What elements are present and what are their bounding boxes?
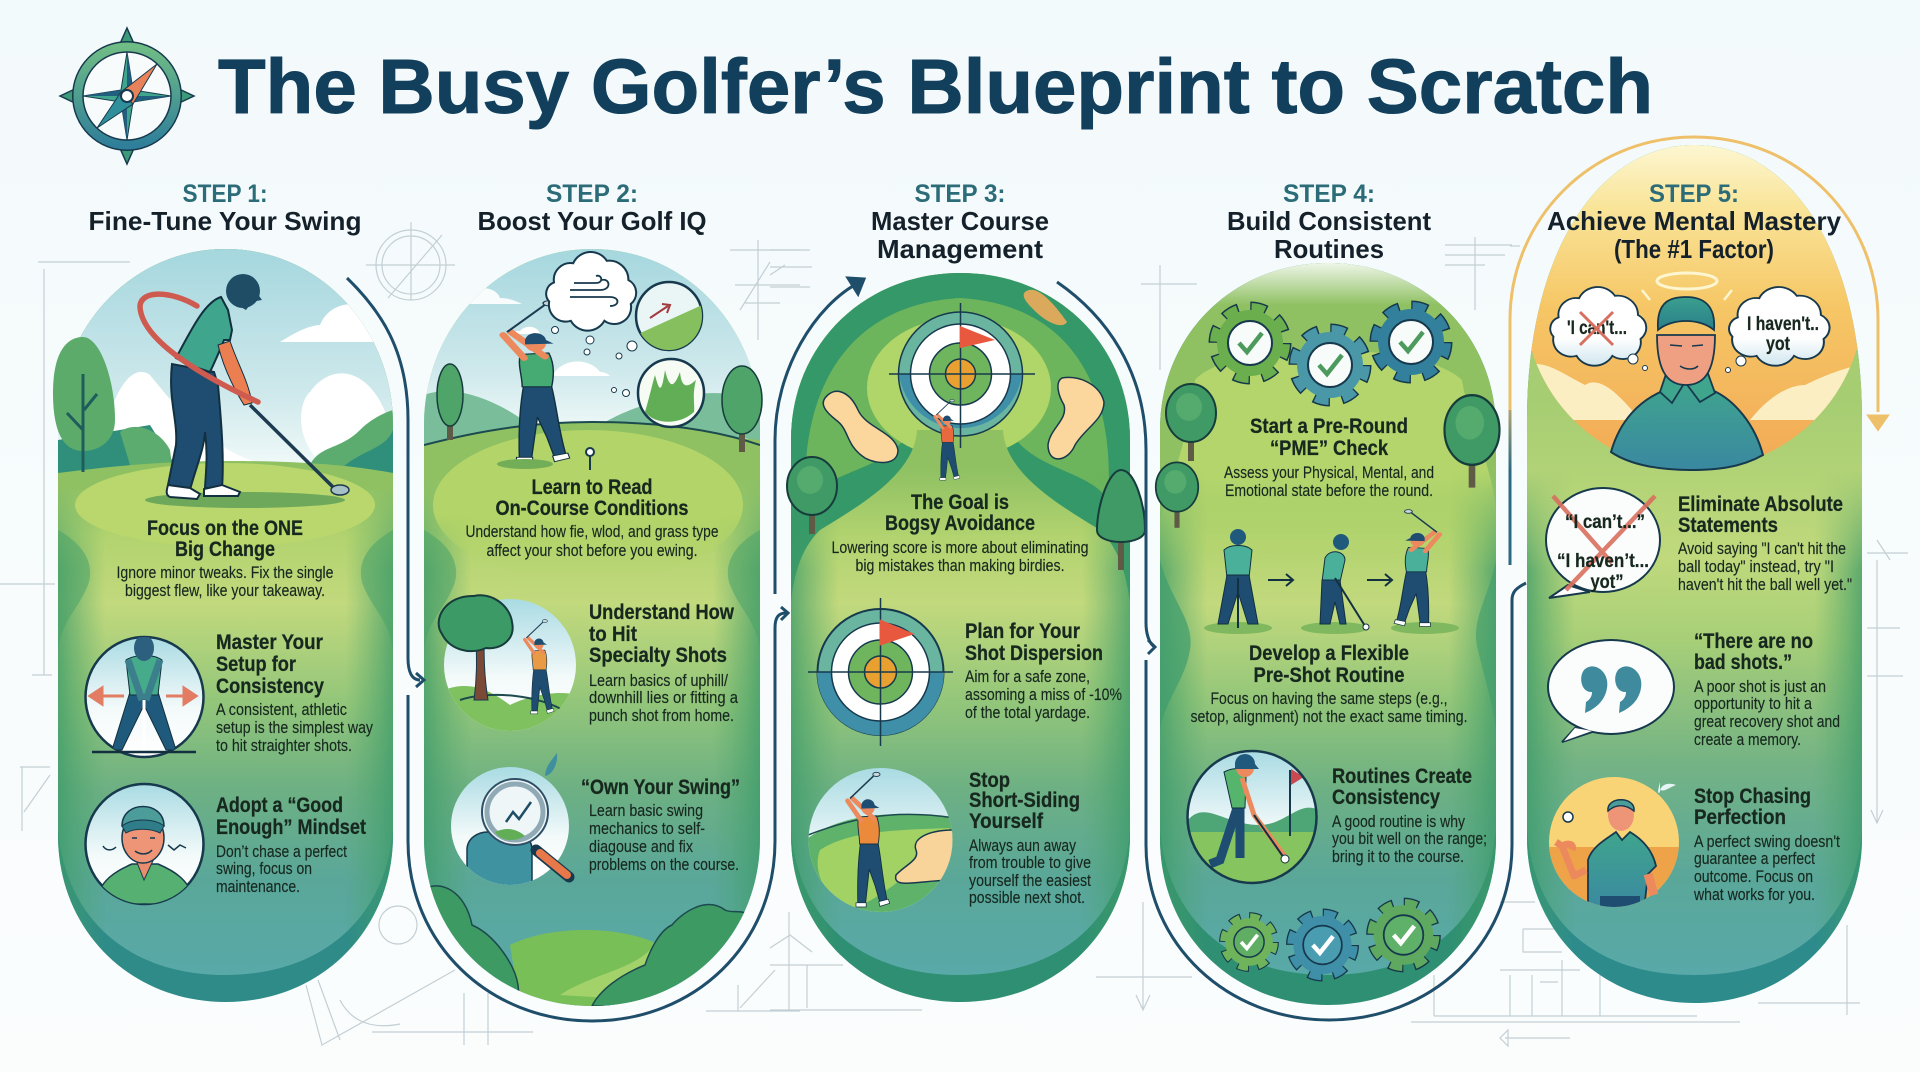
text: the goal is bogsy avoidance: big mistakes than making birdies.: [856, 557, 1064, 575]
icon: compass: [60, 28, 194, 164]
illustration: calm golfer with thought clouds: yot: [1766, 334, 1791, 355]
text: stop short-siding yourself: Yourself: [969, 810, 1044, 833]
text: own your swing: “Own Your Swing”: [581, 776, 740, 799]
text: focus on the one big change: Big Change: [175, 538, 275, 561]
icon: golfer beside bunker: [808, 768, 955, 915]
panel 3 background: [791, 200, 1130, 1002]
text: understand specialty shots: downhill lies or fitting a: [589, 689, 739, 707]
text: flexible pre-shot routine: Focus on having the same steps (e.g.,: [1210, 690, 1448, 708]
title: The Busy Golfer’s Blueprint to Scratch: [218, 44, 1653, 130]
text: eliminate absolute statements: [1678, 493, 1852, 594]
icon: golfer shrugging in sun circle: [1549, 777, 1679, 910]
text: understand specialty shots: punch shot from home.: [589, 707, 734, 725]
text: flexible pre-shot routine: Pre-Shot Routine: [1254, 664, 1404, 687]
text: adopt a good enough mindset: Adopt a “Good: [216, 794, 343, 817]
text: stop short-siding yourself: [969, 769, 1091, 907]
text: routines create consistency: you bit well on the range;: [1332, 830, 1487, 848]
text: there are no bad shots: opportunity to hit a: [1694, 695, 1813, 713]
illustration: calm golfer with thought clouds: 'I can't...: [1567, 318, 1627, 339]
text: there are no bad shots: create a memory.: [1694, 731, 1801, 749]
text: pre-round pme check: [1224, 415, 1434, 500]
icon: crossed out speech bubble: yot”: [1590, 572, 1624, 593]
text: understand specialty shots: Understand How: [589, 601, 735, 624]
heading: step 2: STEP 2:: [546, 180, 638, 208]
arrow: step 4 loop to step 5: [1146, 400, 1526, 1020]
text: the goal is bogsy avoidance: Bogsy Avoidance: [885, 512, 1035, 535]
text: learn to read on-course conditions: [466, 476, 718, 560]
text: focus on the one big change: Focus on the ONE: [147, 517, 303, 540]
text: there are no bad shots: bad shots.”: [1694, 651, 1792, 674]
text: stop short-siding yourself: Always aun away: [969, 837, 1077, 855]
text: master your setup: to hit straighter shots.: [216, 737, 352, 755]
text: there are no bad shots: “There are no: [1694, 630, 1813, 653]
text: master your setup: Consistency: [216, 675, 324, 698]
heading: step 5: Achieve Mental Mastery: [1547, 206, 1842, 236]
heading: step 4: Routines: [1274, 234, 1384, 264]
heading: step 3: Management: [877, 234, 1043, 264]
text: learn to read on-course conditions: Learn to Read: [532, 476, 652, 499]
text: stop chasing perfection: Stop Chasing: [1694, 785, 1811, 808]
arrow: step 2 loop to step 3: [408, 278, 864, 1021]
illustration: golfer reading conditions with thought bubbles: [437, 252, 762, 470]
text: focus on the one big change: [116, 517, 334, 600]
panel: step 3: [787, 200, 1145, 1002]
icon: tree and specialty shot golfer: [439, 595, 576, 735]
text: learn to read on-course conditions: On-Course Conditions: [496, 497, 688, 520]
text: own your swing: [581, 776, 740, 874]
text: stop short-siding yourself: possible next shot.: [969, 889, 1085, 907]
heading: step 3: [871, 180, 1049, 264]
text: adopt a good enough mindset: Don’t chase a perfect: [216, 843, 347, 861]
icon: target with flag: [808, 598, 953, 746]
text: master your setup: [216, 631, 374, 755]
heading: step 3: Master Course: [871, 206, 1049, 236]
text: plan for your shot dispersion: Plan for Your: [965, 620, 1080, 643]
text: pre-round pme check: Start a Pre-Round: [1250, 415, 1408, 438]
text: stop short-siding yourself: yourself the easiest: [969, 872, 1091, 890]
heading: step 5: [1547, 180, 1842, 264]
illustration: target with flag, bunkers and golfer: [787, 303, 1145, 570]
text: eliminate absolute statements: Eliminate Absolute: [1678, 493, 1843, 516]
icon: quote speech bubble: [1548, 640, 1674, 742]
text: plan for your shot dispersion: of the total yardage.: [965, 704, 1090, 722]
panel: step 4: [1156, 200, 1500, 1005]
text: routines create consistency: Consistency: [1332, 786, 1440, 809]
text: flexible pre-shot routine: setop, alignment) not the exact same timing.: [1190, 708, 1468, 726]
text: own your swing: Learn basic swing: [589, 802, 703, 820]
illustration: golfer at address with red swing path: [53, 274, 349, 508]
arrow: step 1 to step 2: [347, 278, 424, 687]
text: flexible pre-shot routine: [1190, 642, 1468, 726]
text: pre-round pme check: Emotional state before the round.: [1225, 482, 1433, 500]
heading: step 1: STEP 1:: [182, 180, 268, 208]
text: focus on the one big change: Ignore minor tweaks. Fix the single: [116, 564, 334, 582]
text: pre-round pme check: “PME” Check: [1270, 437, 1388, 460]
heading: step 3: STEP 3:: [914, 180, 1006, 208]
heading: step 4: [1227, 180, 1431, 264]
text: plan for your shot dispersion: [965, 620, 1122, 722]
text: master your setup: setup is the simplest way: [216, 719, 374, 737]
arrow: step 3 to step 4: [1057, 282, 1155, 654]
icon: three checked gears: [1217, 309, 1444, 398]
text: eliminate absolute statements: Statements: [1678, 514, 1778, 537]
text: master your setup: Setup for: [216, 653, 296, 676]
icon: golfer on the range: [1188, 751, 1318, 885]
text: there are no bad shots: [1694, 630, 1840, 749]
text: plan for your shot dispersion: assoming a miss of -10%: [965, 686, 1122, 704]
icon: crossed out speech bubble: “I haven’t...: [1557, 551, 1649, 572]
text: understand specialty shots: Specialty Shots: [589, 644, 727, 667]
text: flexible pre-shot routine: Develop a Flexible: [1249, 642, 1409, 665]
panel 1 background: [58, 200, 395, 1002]
text: adopt a good enough mindset: swing, focus on: [216, 860, 312, 878]
text: stop short-siding yourself: Short-Siding: [969, 789, 1080, 812]
panel: step 2: [420, 249, 762, 1006]
text: stop chasing perfection: A perfect swing doesn't: [1694, 833, 1840, 851]
icon: bottom gears with check marks: [1225, 905, 1433, 974]
panel 5 background: [1524, 100, 1864, 1003]
text: master your setup: A consistent, athletic: [216, 701, 347, 719]
panel 2 background: [420, 249, 760, 1006]
text: stop chasing perfection: [1693, 785, 1840, 904]
text: stop chasing perfection: guarantee a perfect: [1694, 850, 1815, 868]
text: routines create consistency: Routines Create: [1332, 765, 1472, 788]
text: learn to read on-course conditions: affect your shot before you ewing.: [486, 542, 698, 560]
text: adopt a good enough mindset: Enough” Mindset: [216, 816, 366, 839]
icon: crossed out speech bubble: [1546, 488, 1660, 598]
text: understand specialty shots: Learn basics of uphill/: [589, 672, 728, 690]
text: stop chasing perfection: outcome. Focus on: [1694, 868, 1813, 886]
text: plan for your shot dispersion: Aim for a safe zone,: [965, 668, 1090, 686]
heading: step 5: STEP 5:: [1649, 180, 1739, 208]
text: stop short-siding yourself: from trouble to give: [969, 854, 1091, 872]
text: adopt a good enough mindset: maintenance.: [216, 878, 300, 896]
text: plan for your shot dispersion: Shot Dispersion: [965, 642, 1103, 665]
text: eliminate absolute statements: haven't hit the ball well yet.": [1678, 576, 1852, 594]
heading: step 1: [88, 180, 362, 236]
text: eliminate absolute statements: Avoid saying "I can't hit the: [1678, 540, 1846, 558]
text: understand specialty shots: [589, 601, 739, 725]
text: the goal is bogsy avoidance: Lowering score is more about eliminating: [832, 539, 1088, 557]
illustration: calm golfer with thought clouds: [1550, 273, 1830, 470]
text: own your swing: problems on the course.: [589, 856, 739, 874]
text: pre-round pme check: Assess your Physical, Mental, and: [1224, 464, 1434, 482]
heading: step 1: Fine-Tune Your Swing: [88, 206, 362, 236]
text: own your swing: mechanics to self-: [589, 820, 705, 838]
panel: step 5: [1524, 100, 1864, 1003]
text: focus on the one big change: biggest flew, like your takeaway.: [125, 582, 325, 600]
text: stop chasing perfection: what works for you.: [1693, 886, 1815, 904]
text: the goal is bogsy avoidance: [832, 491, 1088, 575]
icon: crossed out speech bubble: “I can’t...”: [1565, 512, 1645, 533]
text: master your setup: Master Your: [216, 631, 323, 654]
heading: step 2: Boost Your Golf IQ: [478, 206, 706, 236]
text: learn to read on-course conditions: Understand how fie, wlod, and grass type: [466, 523, 718, 541]
text: routines create consistency: A good routine is why: [1332, 813, 1466, 831]
text: eliminate absolute statements: ball today" instead, try "I: [1678, 558, 1834, 576]
heading: step 2: [478, 180, 706, 236]
heading: step 4: Build Consistent: [1227, 206, 1431, 236]
icon: setup stance: [86, 635, 204, 757]
text: stop chasing perfection: Perfection: [1694, 806, 1786, 829]
icon: relaxed golfer portrait: [86, 784, 204, 904]
text: routines create consistency: bring it to the course.: [1332, 848, 1464, 866]
text: understand specialty shots: to Hit: [589, 623, 637, 646]
heading: step 5: (The #1 Factor): [1614, 234, 1774, 264]
text: the goal is bogsy avoidance: The Goal is: [911, 491, 1009, 514]
panel 4 background: [1160, 200, 1496, 1005]
text: stop short-siding yourself: Stop: [969, 769, 1010, 792]
illustration: calm golfer with thought clouds: I haven't..: [1747, 314, 1819, 335]
heading: step 4: STEP 4:: [1283, 180, 1375, 208]
text: there are no bad shots: A poor shot is just an: [1694, 678, 1826, 696]
text: routines create consistency: [1332, 765, 1487, 866]
arrow: golden arch over step 5: [1510, 137, 1887, 429]
illustration: three stage pre-shot routine: [1204, 510, 1459, 634]
text: own your swing: diagouse and fix: [589, 838, 694, 856]
text: adopt a good enough mindset: [216, 794, 366, 896]
icon: magnifier over swing: [451, 753, 569, 890]
illustration: course trees: [1156, 384, 1500, 528]
text: there are no bad shots: great recovery shot and: [1694, 713, 1840, 731]
panel: step 1: [53, 200, 395, 1002]
